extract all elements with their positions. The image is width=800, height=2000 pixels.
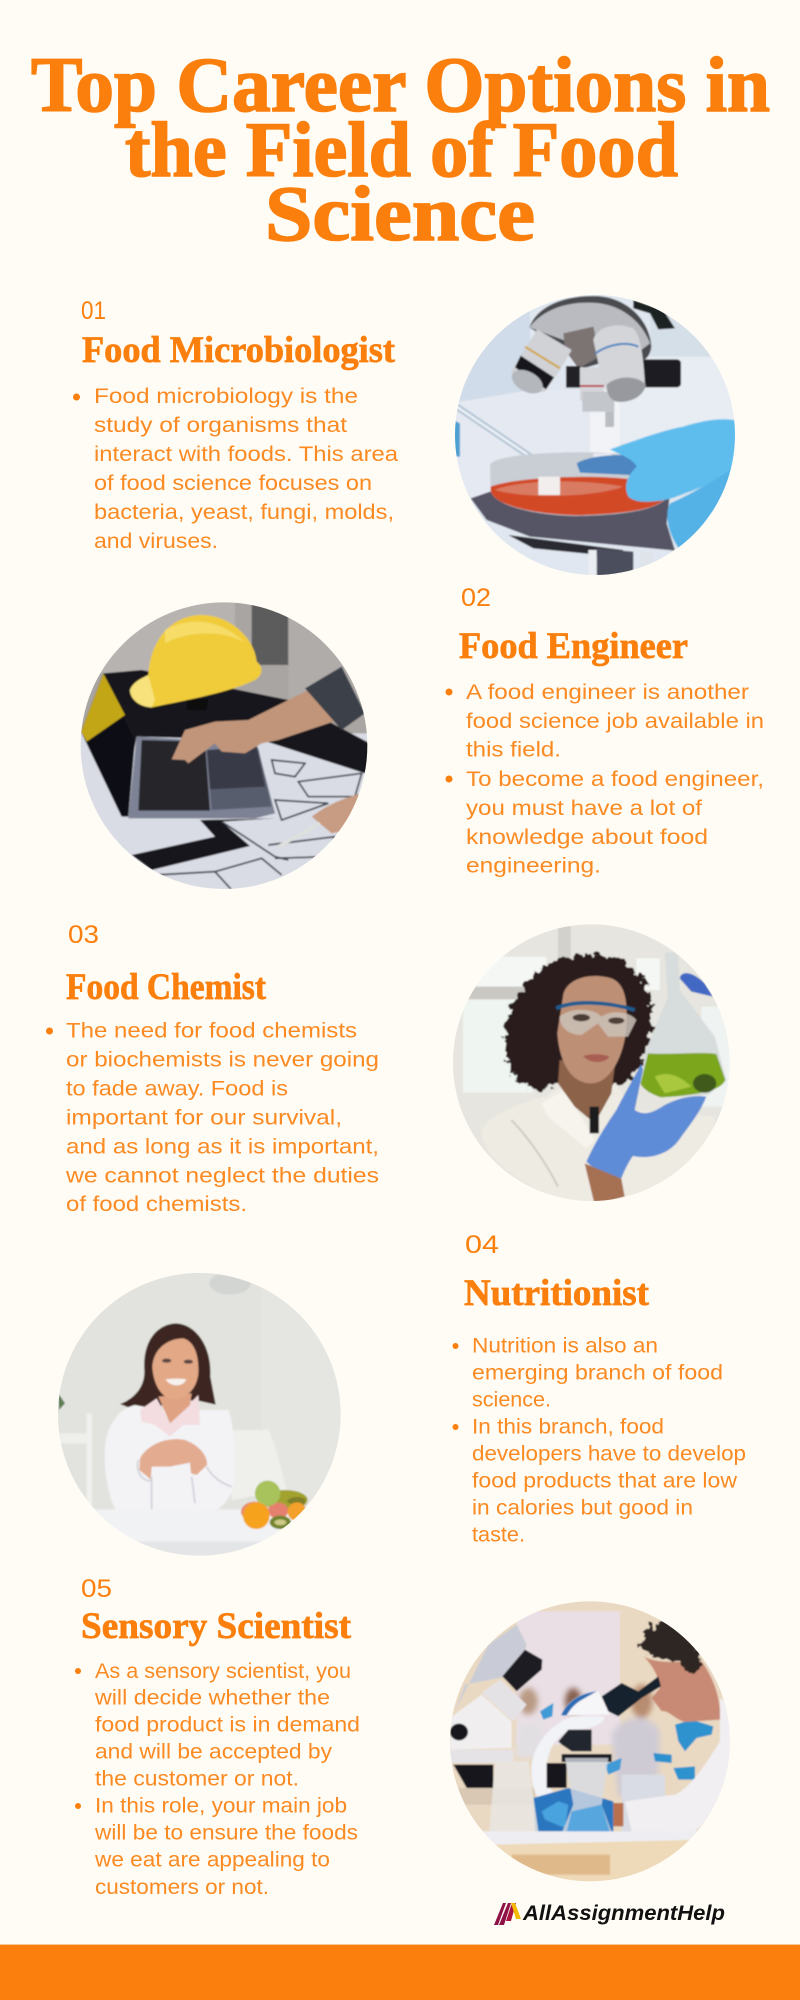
text block: chemist description: The need for food chemists — [66, 1018, 357, 1042]
number 01: 01 — [81, 297, 106, 325]
text block: microbiologist description: interact with foods. This area — [94, 442, 398, 466]
table — [95, 1509, 294, 1542]
text block: chemist description: of food chemists. — [66, 1192, 247, 1216]
text block: engineer description: knowledge about food — [466, 825, 708, 849]
logo: AllAssignmentHelp: AllAssignmentHelp — [522, 1902, 725, 1925]
arm and hand — [172, 690, 338, 763]
neck — [558, 1060, 615, 1123]
blueprints base — [75, 733, 370, 895]
text block: microbiologist description: of food science focuses on — [94, 471, 372, 495]
text block: nutritionist description: in calories but good in — [472, 1496, 693, 1520]
text block: sensory scientist description: food product is in demand — [95, 1712, 360, 1736]
panel: nutritionist — [452, 1231, 746, 1546]
stage — [471, 492, 675, 551]
text block: nutritionist description: developers have to develop — [472, 1442, 746, 1466]
text block: sensory scientist description: we eat are appealing to — [94, 1848, 330, 1872]
number 05: 05 — [81, 1575, 112, 1603]
number 03: 03 — [68, 921, 99, 949]
centre microscope — [530, 1716, 604, 1798]
blurred people — [515, 1685, 660, 1798]
photo: scientist at microscope — [445, 1598, 735, 1888]
text block: microbiologist description — [73, 384, 398, 553]
number 04: 04 — [465, 1231, 499, 1259]
scientist — [644, 1656, 720, 1722]
collar — [140, 1395, 200, 1437]
beaker — [622, 1775, 665, 1831]
coat — [625, 1698, 735, 1831]
panel: food engineer — [446, 584, 764, 878]
flask & glove — [533, 1788, 613, 1831]
text block: microbiologist description: study of organisms that — [94, 413, 347, 437]
text block: chemist description — [46, 1018, 379, 1216]
text block: nutritionist description: taste. — [472, 1522, 525, 1546]
heading: food chemist: Food Chemist — [66, 967, 267, 1008]
centre stem — [580, 367, 604, 401]
gloves — [680, 973, 713, 997]
pipette — [457, 404, 532, 456]
hair — [120, 1323, 216, 1410]
glove — [610, 419, 740, 502]
text block: sensory scientist description: As a sensory scientist, you — [95, 1659, 351, 1683]
hard hat — [130, 615, 261, 707]
text block: engineer description: this field. — [466, 738, 561, 762]
right objective — [593, 325, 645, 402]
panel: sensory scientist — [75, 1575, 360, 1899]
text block: sensory scientist description — [75, 1659, 360, 1899]
text block: sensory scientist description: In this role, your main job — [95, 1794, 347, 1818]
footer band — [0, 1944, 800, 2000]
heading: sensory scientist: Sensory Scientist — [81, 1606, 352, 1647]
laptop base — [128, 737, 275, 818]
heading: nutritionist: Nutritionist — [464, 1273, 650, 1314]
neck + face — [158, 1393, 192, 1423]
text block: chemist description: to fade away. Food is — [66, 1076, 288, 1100]
laptop screen — [84, 718, 135, 818]
dish — [490, 452, 668, 516]
text block: microbiologist description: Food microbiology is the — [94, 384, 358, 408]
bench — [445, 1831, 735, 1845]
text block: nutritionist description — [452, 1334, 746, 1546]
coat — [481, 1083, 715, 1205]
panel: food chemist — [46, 921, 379, 1216]
photo: chemist with green flask — [448, 920, 733, 1205]
left microscope — [450, 1695, 512, 1750]
desk — [81, 670, 370, 817]
turret — [529, 296, 651, 368]
flask — [641, 953, 726, 1097]
text block: nutritionist description: science. — [472, 1388, 551, 1412]
title — [31, 41, 770, 257]
text block: engineer description: food science job available in — [466, 709, 764, 733]
heading: food microbiologist: Food Microbiologist — [82, 330, 396, 371]
text block: sensory scientist description: will be to ensure the foods — [94, 1820, 358, 1844]
text block: microbiologist description: bacteria, yeast, fungi, molds, — [94, 500, 394, 524]
icon: logo mark — [494, 1903, 521, 1925]
text block: chemist description: or biochemists is never going — [66, 1048, 379, 1072]
text block: chemist description: and as long as it is important, — [66, 1134, 379, 1158]
photo: nutritionist at desk with fruit — [55, 1270, 345, 1560]
title: Science — [265, 170, 535, 257]
text block: sensory scientist description: will decide whether the — [94, 1686, 330, 1710]
goggles — [560, 1010, 636, 1037]
text block: engineer description: A food engineer is another — [466, 680, 749, 704]
left objective — [511, 329, 572, 392]
text block: engineer description — [446, 680, 764, 878]
title: Top Career Options in — [31, 41, 770, 128]
text block: nutritionist description: food products that are low — [472, 1468, 737, 1492]
text block: sensory scientist description: and will be accepted by — [95, 1740, 332, 1764]
eyepiece — [602, 1676, 661, 1716]
text block: engineer description: To become a food engineer, — [466, 767, 764, 791]
heading: food engineer: Food Engineer — [459, 626, 688, 667]
text block: engineer description: engineering. — [466, 854, 601, 878]
text block: nutritionist description: emerging branch of food — [472, 1360, 723, 1384]
text block: engineer description: you must have a lot of — [466, 796, 702, 820]
number 02: 02 — [461, 584, 491, 612]
face — [557, 976, 627, 1083]
text block: chemist description: we cannot neglect the duties — [65, 1164, 379, 1188]
panel: food microbiologist — [73, 297, 398, 553]
text block: nutritionist description: Nutrition is also an — [472, 1334, 658, 1358]
hair — [504, 955, 652, 1090]
text block: chemist description: important for our survival, — [66, 1106, 342, 1130]
title: the Field of Food — [125, 106, 678, 193]
fruit — [262, 1490, 308, 1510]
knob — [642, 359, 681, 387]
text block: microbiologist description: and viruses. — [94, 529, 218, 553]
photo: laptop and hard hat — [75, 600, 370, 895]
text block: sensory scientist description: customers or not. — [95, 1875, 269, 1899]
text block: sensory scientist description: the customer or not. — [95, 1766, 299, 1790]
photo: microscope and petri dish — [450, 290, 740, 580]
hands — [139, 1439, 207, 1479]
forearm — [585, 1163, 625, 1205]
text block: nutritionist description: In this branch, food — [472, 1414, 664, 1438]
coat — [105, 1405, 235, 1514]
